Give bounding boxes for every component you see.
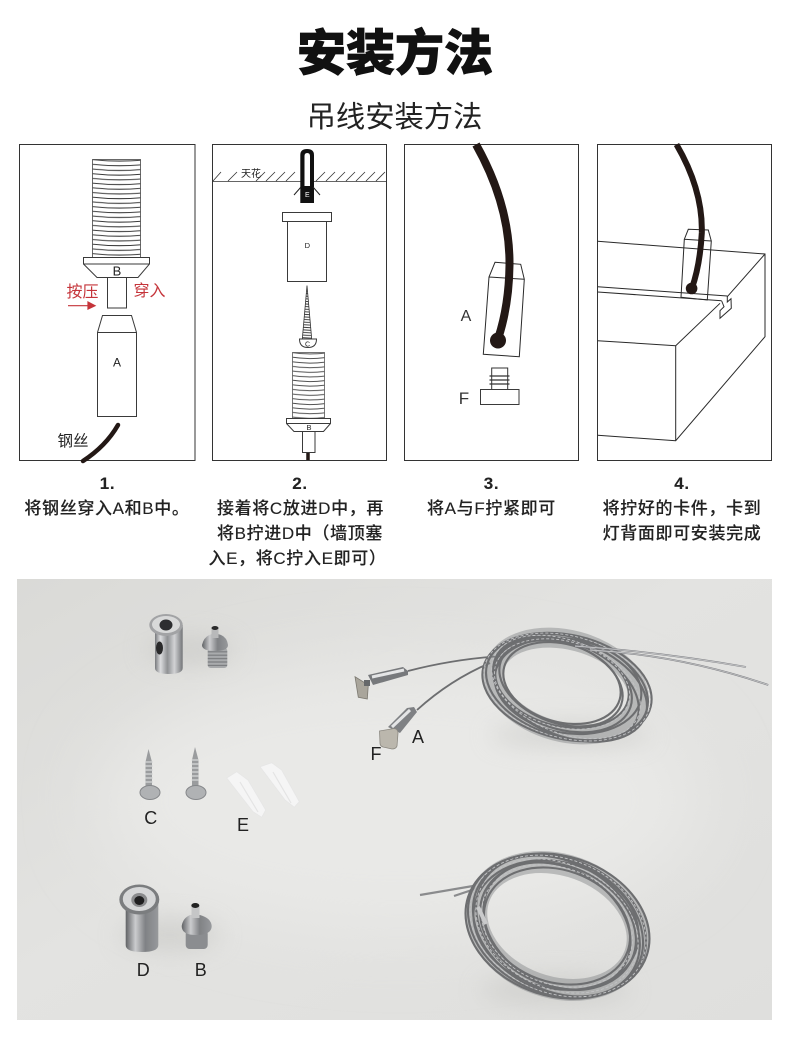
label press: 按压 <box>66 278 99 302</box>
label C: C <box>144 808 157 828</box>
screws C <box>140 747 206 800</box>
step 4 caption: 灯背面即可安装完成 <box>603 523 761 543</box>
label C: C <box>305 342 310 348</box>
connector <box>681 229 711 300</box>
subtitle: 吊线安装方法 <box>307 94 482 136</box>
wire <box>306 453 310 460</box>
part shadows <box>120 636 650 1004</box>
connector with plate F lower <box>380 707 417 749</box>
label A: A <box>461 308 472 325</box>
wall plugs E <box>227 763 299 817</box>
part A <box>98 316 136 416</box>
step 2 caption: 2. <box>292 474 308 493</box>
threaded part B <box>292 352 324 418</box>
title: 安装方法 <box>297 14 493 85</box>
label E: E <box>237 815 249 835</box>
step 4 caption: 4. <box>674 474 690 493</box>
step 2 caption: 入E，将C拧入E即可） <box>208 549 387 568</box>
label B: B <box>113 264 121 278</box>
flange of part B <box>84 258 150 278</box>
step 1 caption: 将钢丝穿入A和B中。 <box>24 499 190 518</box>
label A: A <box>113 356 121 370</box>
part E wall plug <box>300 149 314 203</box>
ceiling hatch <box>212 172 386 182</box>
label F: F <box>370 744 382 764</box>
sleeve of part B <box>108 278 126 308</box>
panel: step 4 diagram <box>598 144 772 460</box>
part A connector <box>483 262 524 357</box>
label A: A <box>412 727 424 747</box>
panel: step 1 diagram <box>20 144 195 461</box>
steel wire <box>676 144 702 288</box>
lower cable coil <box>420 851 650 1001</box>
step 2 caption: 将B拧进D中（墙顶塞 <box>217 524 383 543</box>
step 3 caption <box>427 474 556 518</box>
step 3 caption: 将A与F拧紧即可 <box>427 499 556 518</box>
steel wire <box>476 144 510 338</box>
part F screw <box>492 368 508 390</box>
part B upper <box>202 626 228 668</box>
label D: D <box>305 241 311 250</box>
part D <box>282 212 332 282</box>
part D upper <box>149 614 183 674</box>
screw C <box>302 286 312 339</box>
steel wire <box>83 425 118 461</box>
upper cable coil <box>408 628 768 744</box>
threaded part <box>92 160 140 258</box>
label D: D <box>137 960 150 980</box>
step 1 caption <box>24 474 190 518</box>
step 4 caption <box>603 474 761 543</box>
panel: step 3 diagram <box>404 144 578 460</box>
label F: F <box>459 389 469 408</box>
step 4 caption: 将拧好的卡件，卡到 <box>603 499 761 518</box>
lamp body <box>598 241 765 441</box>
label steel wire: 钢丝 <box>57 429 89 451</box>
connector with plate F upper <box>355 667 408 699</box>
step 3 caption: 3. <box>484 474 499 493</box>
arrow <box>68 302 95 309</box>
step 2 caption: 接着将C放进D中，再 <box>217 499 384 518</box>
label E: E <box>305 192 310 199</box>
label ceiling: 天花 <box>241 165 261 180</box>
photo: parts <box>17 579 772 1025</box>
label thread through: 穿入 <box>133 277 166 301</box>
part D lower <box>119 884 159 952</box>
photo background <box>17 579 772 1020</box>
label B: B <box>306 423 312 432</box>
T slot <box>720 296 731 318</box>
step 1 caption: 1. <box>100 474 115 493</box>
step 2 caption <box>208 474 387 568</box>
part B lower <box>182 903 212 949</box>
panel: step 2 diagram <box>212 144 386 460</box>
label B: B <box>195 960 207 980</box>
